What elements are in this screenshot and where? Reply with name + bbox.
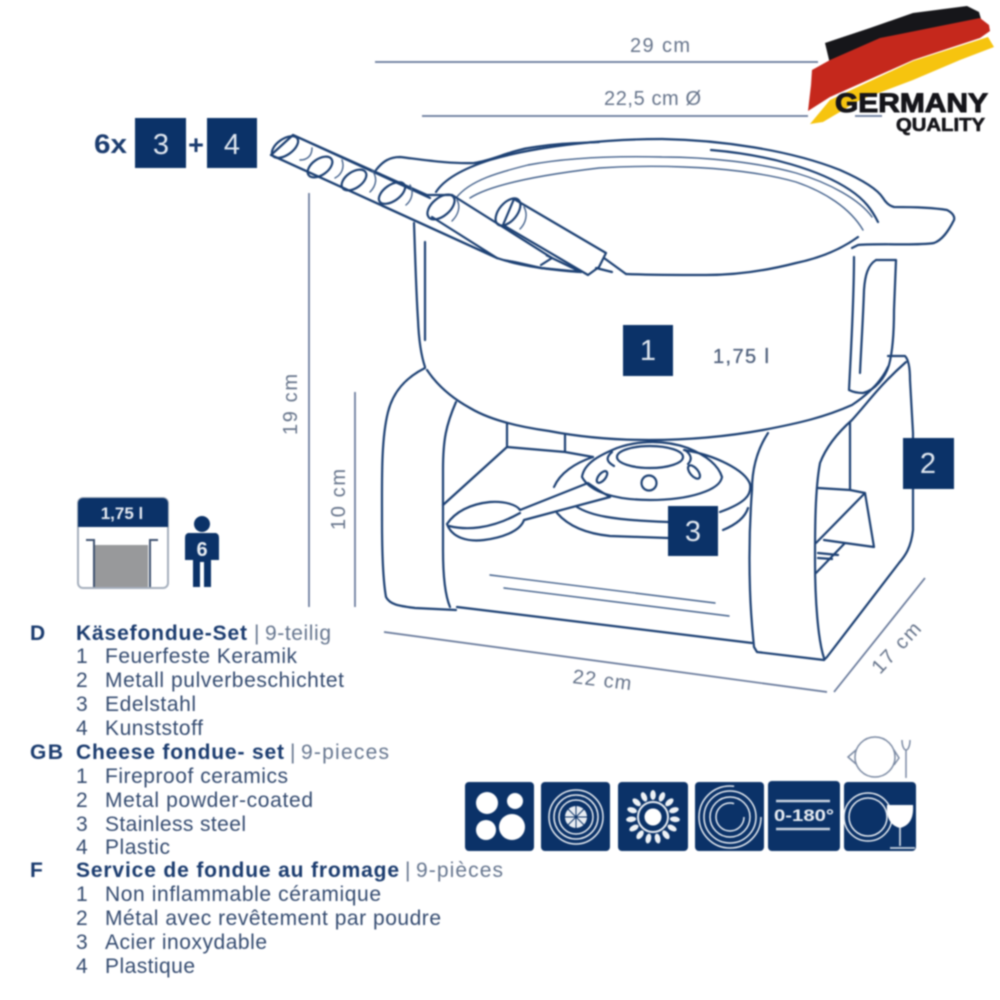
label 1 with capacity xyxy=(623,325,769,376)
icon: ceramic hob xyxy=(465,782,534,851)
icon: oven 0-180°: 0-180° xyxy=(774,806,834,825)
icon: gas hob xyxy=(618,782,688,851)
icon: oven 0-180° xyxy=(768,781,840,851)
text block: French: Métal avec revêtement par poudre xyxy=(105,907,441,930)
icon: volume 1,75 l xyxy=(78,498,168,588)
text block: English: | xyxy=(290,741,295,764)
text block: French xyxy=(30,859,503,978)
text block: German: 1 xyxy=(76,645,88,668)
text block: German xyxy=(30,622,344,740)
text block: German: 3 xyxy=(76,693,88,716)
text block: English: 4 xyxy=(76,836,88,859)
text block: German: Feuerfeste Keramik xyxy=(105,645,298,668)
icon: 6 persons: 6 xyxy=(196,539,208,561)
label 3 xyxy=(668,506,718,556)
label 1 with capacity: 1 xyxy=(640,335,656,367)
text block: English: 1 xyxy=(76,765,88,788)
text block: English: 3 xyxy=(76,813,88,836)
dimension: height 10 cm: 10 cm xyxy=(328,469,350,530)
label 2: 2 xyxy=(920,448,936,480)
text block: English: 2 xyxy=(76,789,88,812)
logo: Germany quality flag: QUALITY xyxy=(896,115,985,135)
part count: 6x 3 + 4 xyxy=(94,118,257,168)
illustration: fondue stand xyxy=(382,356,913,660)
part count: 6x 3 + 4: + xyxy=(188,130,204,160)
text block: German: Edelstahl xyxy=(105,693,196,716)
text block: French: Acier inoxydable xyxy=(105,931,267,954)
text block: German: D xyxy=(30,622,45,645)
part count: 6x 3 + 4: 3 xyxy=(153,129,169,161)
icon: electric hob xyxy=(695,782,764,851)
icon: volume 1,75 l: 1,75 l xyxy=(101,504,143,523)
part count: 6x 3 + 4: 6x xyxy=(94,129,127,159)
illustration: fondue pot xyxy=(376,139,954,440)
dimension: height 19 cm: 19 cm xyxy=(280,374,302,435)
dimension: depth 22 cm xyxy=(384,632,827,695)
text block: English: Fireproof ceramics xyxy=(105,765,288,788)
text block: German: 4 xyxy=(76,717,88,740)
text block: French: 9-pièces xyxy=(416,859,503,882)
text block: English: Cheese fondue- set xyxy=(76,741,284,764)
illustration: fondue forks xyxy=(268,132,626,275)
dimension: depth 17 cm: 17 cm xyxy=(868,618,926,678)
text block: English: 9-pieces xyxy=(301,741,389,764)
text block: French: 3 xyxy=(76,931,88,954)
text block: French: F xyxy=(30,859,43,882)
logo: Germany quality flag: GERMANY xyxy=(835,88,988,118)
label 1 with capacity: 1,75 l xyxy=(713,346,769,368)
text block: German: Käsefondue-Set xyxy=(76,622,247,645)
text block: English: GB xyxy=(30,741,63,764)
text block: English: Stainless steel xyxy=(105,813,246,836)
icon: 6 persons xyxy=(185,516,219,587)
text block: German: Metall pulverbeschichtet xyxy=(105,669,344,692)
icon: halogen hob xyxy=(541,782,610,851)
text block: German: | xyxy=(254,622,259,645)
icon: plate and fork outline xyxy=(848,737,910,778)
text block: English: Plastic xyxy=(105,836,170,859)
text block: French: Service de fondue au fromage xyxy=(76,859,399,882)
text block: German: Kunststoff xyxy=(105,717,203,740)
icon: dishwasher xyxy=(844,782,916,851)
logo: Germany quality flag xyxy=(808,6,994,135)
text block: French: 1 xyxy=(76,883,88,906)
dimension: depth 17 cm xyxy=(834,578,926,692)
dimension: depth 22 cm: 22 cm xyxy=(571,666,633,695)
label 3: 3 xyxy=(685,516,701,548)
text block: English: Metal powder-coated xyxy=(105,789,313,812)
illustration: burner xyxy=(447,442,750,540)
text block: French: Plastique xyxy=(105,955,195,978)
dimension: diameter 22,5 cm: 22,5 cm Ø xyxy=(604,88,701,110)
part count: 6x 3 + 4: 4 xyxy=(224,129,240,161)
text block: English xyxy=(30,741,389,859)
label 2 xyxy=(903,438,954,489)
text block: French: | xyxy=(405,859,410,882)
text block: French: 2 xyxy=(76,907,88,930)
text block: French: Non inflammable céramique xyxy=(105,883,381,906)
text block: French: 4 xyxy=(76,955,88,978)
dimension: width 29 cm: 29 cm xyxy=(630,35,690,57)
text block: German: 9-teilig xyxy=(265,622,331,645)
text block: German: 2 xyxy=(76,669,88,692)
